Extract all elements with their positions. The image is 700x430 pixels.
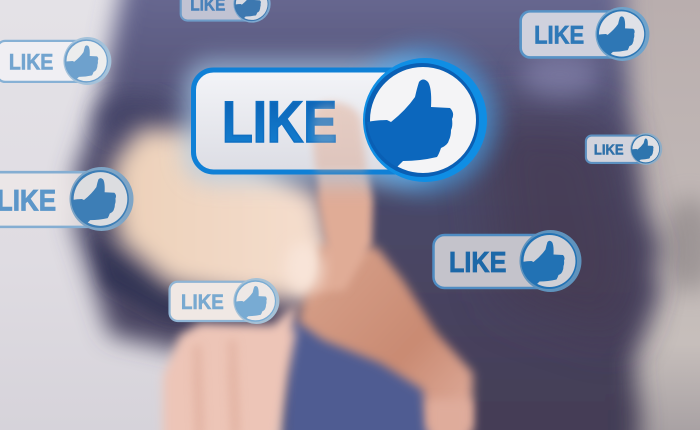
blue shirt wedge below hand: [284, 320, 440, 430]
like badge: main centre: [184, 48, 496, 192]
like badge: bottom: [170, 278, 279, 324]
label text: LIKE: [222, 90, 337, 155]
like badge: right middle: [434, 230, 582, 292]
knuckle highlight: [286, 242, 322, 294]
forearm: [112, 128, 340, 302]
fingertip tint over letter E: [313, 104, 337, 146]
pointing finger: [313, 108, 373, 293]
dark shadow under arm: [92, 235, 255, 325]
dark shirt patch above arm: [97, 98, 173, 138]
like badge: top: [181, 0, 271, 23]
thumb bottom extension: [428, 400, 471, 430]
thumb circle: [363, 58, 487, 182]
like badge: bottom: LIKE: [181, 290, 224, 314]
fingertip behind panel: [313, 102, 367, 172]
like badge: left: [0, 37, 111, 85]
like badge: right middle: LIKE: [449, 247, 506, 279]
right shadow behind shirt: [664, 197, 700, 293]
shirt purple shadow on right: [480, 110, 640, 340]
glow: [184, 60, 434, 182]
shirt highlight top right: [520, 53, 600, 97]
finger gaps: [197, 340, 236, 430]
like badge: right small: LIKE: [594, 142, 624, 159]
button panel: [194, 70, 434, 172]
hand and thumb: [298, 245, 473, 430]
like badge: top right: [521, 7, 649, 61]
lower fingers: [163, 303, 297, 430]
like badge: left middle: [0, 167, 134, 231]
thumb icon: [367, 80, 453, 167]
like badge: left: LIKE: [9, 50, 53, 75]
like badge: top right: LIKE: [534, 22, 584, 50]
like badge: right small: [586, 133, 662, 165]
